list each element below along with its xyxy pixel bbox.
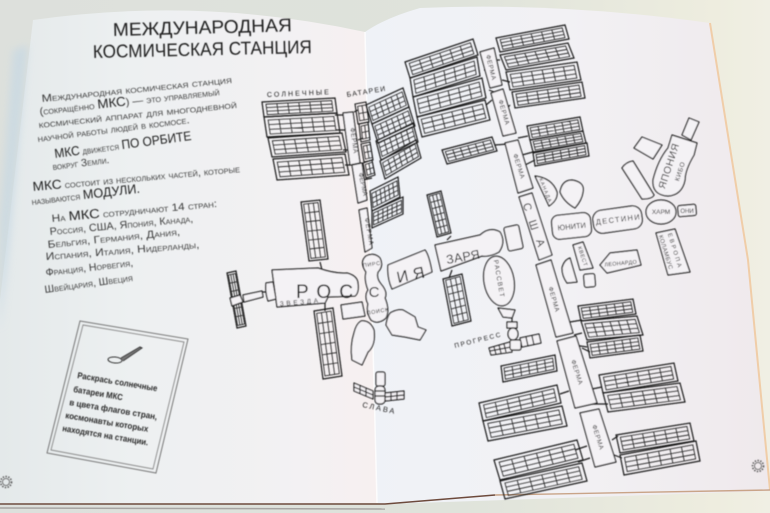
module: Они xyxy=(678,204,696,217)
solar array: small three panels xyxy=(527,117,589,166)
text block: introduction: МКС состоит из нескольких частей, которые xyxy=(32,160,241,194)
truss segments labelled ферма: ФЕРМА xyxy=(484,54,497,81)
solar panel: Звезда lower xyxy=(314,308,342,379)
truss segments labelled ферма: ФЕРМА xyxy=(357,172,368,197)
module: Япония Кибо: ЯПОНИЯ xyxy=(657,142,682,190)
module: Квест xyxy=(573,242,593,270)
label: Слава: СЛАВА xyxy=(362,400,397,416)
module: США truss: Ш xyxy=(526,218,540,232)
spacecraft: Слава xyxy=(354,372,404,404)
module: Япония Кибо: КИБО xyxy=(674,161,687,182)
truss segments labelled ферма: ФЕРМА xyxy=(496,99,510,126)
truss segments labelled ферма: ФЕРМА xyxy=(511,153,526,180)
module: blob under Звезда xyxy=(351,321,374,365)
panel: colouring instruction card: батареи МКС xyxy=(73,384,124,402)
module: blob xyxy=(386,310,426,340)
text block: introduction: МКС движется ПО ОРБИТЕ xyxy=(53,128,193,161)
spacecraft: left docked ship with panels xyxy=(227,271,263,328)
text block: member countries: Франция, Норвегия, xyxy=(45,257,134,279)
module: США truss: А xyxy=(533,238,547,249)
text block: member countries: Испания, Италия, Нидерланды, xyxy=(45,239,200,263)
text block: member countries: На МКС сотрудничают 14 стран: xyxy=(51,195,218,225)
module: small square xyxy=(583,273,596,287)
module: teardrop xyxy=(560,180,583,208)
truss segments labelled ферма: ФЕРМА xyxy=(569,359,584,386)
module: Квест: КВЕСТ xyxy=(576,246,588,267)
solar array: bottom right two panels xyxy=(616,423,700,475)
module: Дестини xyxy=(592,205,643,234)
text block: member countries xyxy=(44,195,218,296)
truss segments labelled ферма: ФЕРМА xyxy=(363,217,374,246)
text block: member countries: Швейцария, Швеция xyxy=(44,272,134,296)
text block: introduction xyxy=(31,74,241,208)
module: square beside Япония xyxy=(634,137,662,159)
title xyxy=(93,14,312,62)
title: КОСМИЧЕСКАЯ СТАНЦИЯ xyxy=(93,36,312,62)
module: Канада manipulator: КАНАДА xyxy=(537,177,553,204)
icon: right page number gear xyxy=(752,460,764,472)
module: Они: ОНИ xyxy=(680,209,694,215)
module: Леонардо xyxy=(600,250,641,273)
icon: paint brush xyxy=(108,347,142,364)
title: МЕЖДУНАРОДНАЯ xyxy=(113,14,292,40)
module: Харм xyxy=(646,200,676,224)
module: Япония Кибо xyxy=(653,135,697,196)
solar array: across the spine, lower xyxy=(370,177,403,228)
truss segments labelled ферма: ФЕРМА xyxy=(590,424,605,451)
module: Леонардо: ЛЕОНАРДО xyxy=(604,260,638,268)
module: Звезда, part of Россия xyxy=(272,268,358,308)
text block: member countries: Бельгия, Германия, Дания, xyxy=(47,226,181,251)
solar array: lower right three panels xyxy=(578,299,643,358)
blue reflection on the left page xyxy=(0,45,28,330)
module: Европа Коламбус: ЕВРОПА xyxy=(666,233,682,269)
module: США truss xyxy=(519,193,552,260)
module: half-round module xyxy=(562,258,577,283)
module: small rectangle under Звезда xyxy=(341,302,365,319)
icon: left page number gear xyxy=(0,476,12,488)
solar panel: Заря lower xyxy=(443,274,471,326)
module: Харм: ХАРМ xyxy=(652,209,670,216)
solar panel: Звезда upper xyxy=(301,200,328,261)
text block: introduction: космический аппарат для многодневной xyxy=(38,99,237,131)
module: central node with пирс and поиск: ПИРС xyxy=(363,261,381,269)
panel: colouring instruction card: находятся на станции. xyxy=(62,423,149,447)
module: Европа Коламбус: КОЛАМБУС xyxy=(657,235,673,271)
solar array: bottom centre xyxy=(479,385,587,499)
module: Рассвет xyxy=(480,254,518,308)
solar array: across the spine, upper xyxy=(355,88,421,179)
module: tube above Япония xyxy=(682,118,699,140)
module: Юнити: ЮНИТИ xyxy=(557,221,586,232)
text block: introduction: называются МОДУЛИ. xyxy=(31,181,141,208)
spacecraft: Прогресс xyxy=(489,308,541,355)
module: central node with пирс and поиск: С xyxy=(369,284,380,301)
module: docking node left of Звезда xyxy=(266,282,276,301)
solar array: upper right four panels xyxy=(496,25,585,108)
label: солнечные: СОЛНЕЧНЫЕ xyxy=(267,89,330,99)
module: США truss: С xyxy=(520,201,534,213)
module: Рассвет: РАССВЕТ xyxy=(492,259,505,298)
connectors between trusses and arrays xyxy=(262,60,622,462)
text block: introduction: (сокращённо МКС) — это управляемый xyxy=(39,83,220,118)
solar array: upper middle four panels xyxy=(405,39,490,137)
text block: introduction: научной работы людей в космосе. xyxy=(37,114,190,145)
label: батареи: БАТАРЕИ xyxy=(346,86,387,99)
truss segments labelled ферма: ФЕРМА xyxy=(546,286,560,313)
module: ИЯ, end of Россия xyxy=(388,250,432,289)
text block: member countries: Россия, США, Япония, Канада, xyxy=(49,213,194,238)
solar array: below Progress xyxy=(501,355,557,382)
module: Европа Коламбус xyxy=(656,229,690,275)
module: Заря xyxy=(435,230,503,271)
module: central node with пирс and поиск xyxy=(362,254,390,322)
solar panel: Заря upper xyxy=(427,191,451,237)
text block: introduction: Международная космическая станция xyxy=(41,74,232,105)
module: long rounded module xyxy=(622,161,654,199)
solar array: top left "солнечные" xyxy=(262,98,349,180)
module: Юнити xyxy=(551,212,592,240)
module: rectangle beside Заря xyxy=(504,225,523,251)
module: Канада manipulator xyxy=(535,176,557,206)
panel: colouring instruction card: Раскрась солнечные xyxy=(77,370,158,393)
text block: introduction: вокруг Земли. xyxy=(52,154,110,173)
module: Дестини: ДЕСТИНИ xyxy=(595,212,640,227)
module: central node with пирс and поиск: ПОИСК xyxy=(366,307,390,317)
solar array: lower right two panels xyxy=(599,363,685,412)
module: ИЯ, end of Россия: ИЯ xyxy=(395,263,431,287)
truss segments labelled ферма: ФЕРМА xyxy=(348,127,359,154)
panel: colouring instruction card: космонавты которых xyxy=(65,410,149,434)
panel: colouring instruction card: в цвета флагов стран, xyxy=(69,397,158,422)
left page xyxy=(0,10,377,505)
right page xyxy=(365,7,770,504)
solar array: single panel left of truss xyxy=(442,137,497,164)
module: Звезда, part of Россия: ЗВЕЗДА xyxy=(280,298,319,308)
module: Звезда, part of Россия: РОС xyxy=(296,282,358,303)
panel: colouring instruction card xyxy=(47,321,188,473)
label: Прогресс: ПРОГРЕСС xyxy=(454,332,502,350)
truss segments labelled ферма xyxy=(343,48,616,467)
module: Заря: ЗАРЯ xyxy=(445,247,482,267)
